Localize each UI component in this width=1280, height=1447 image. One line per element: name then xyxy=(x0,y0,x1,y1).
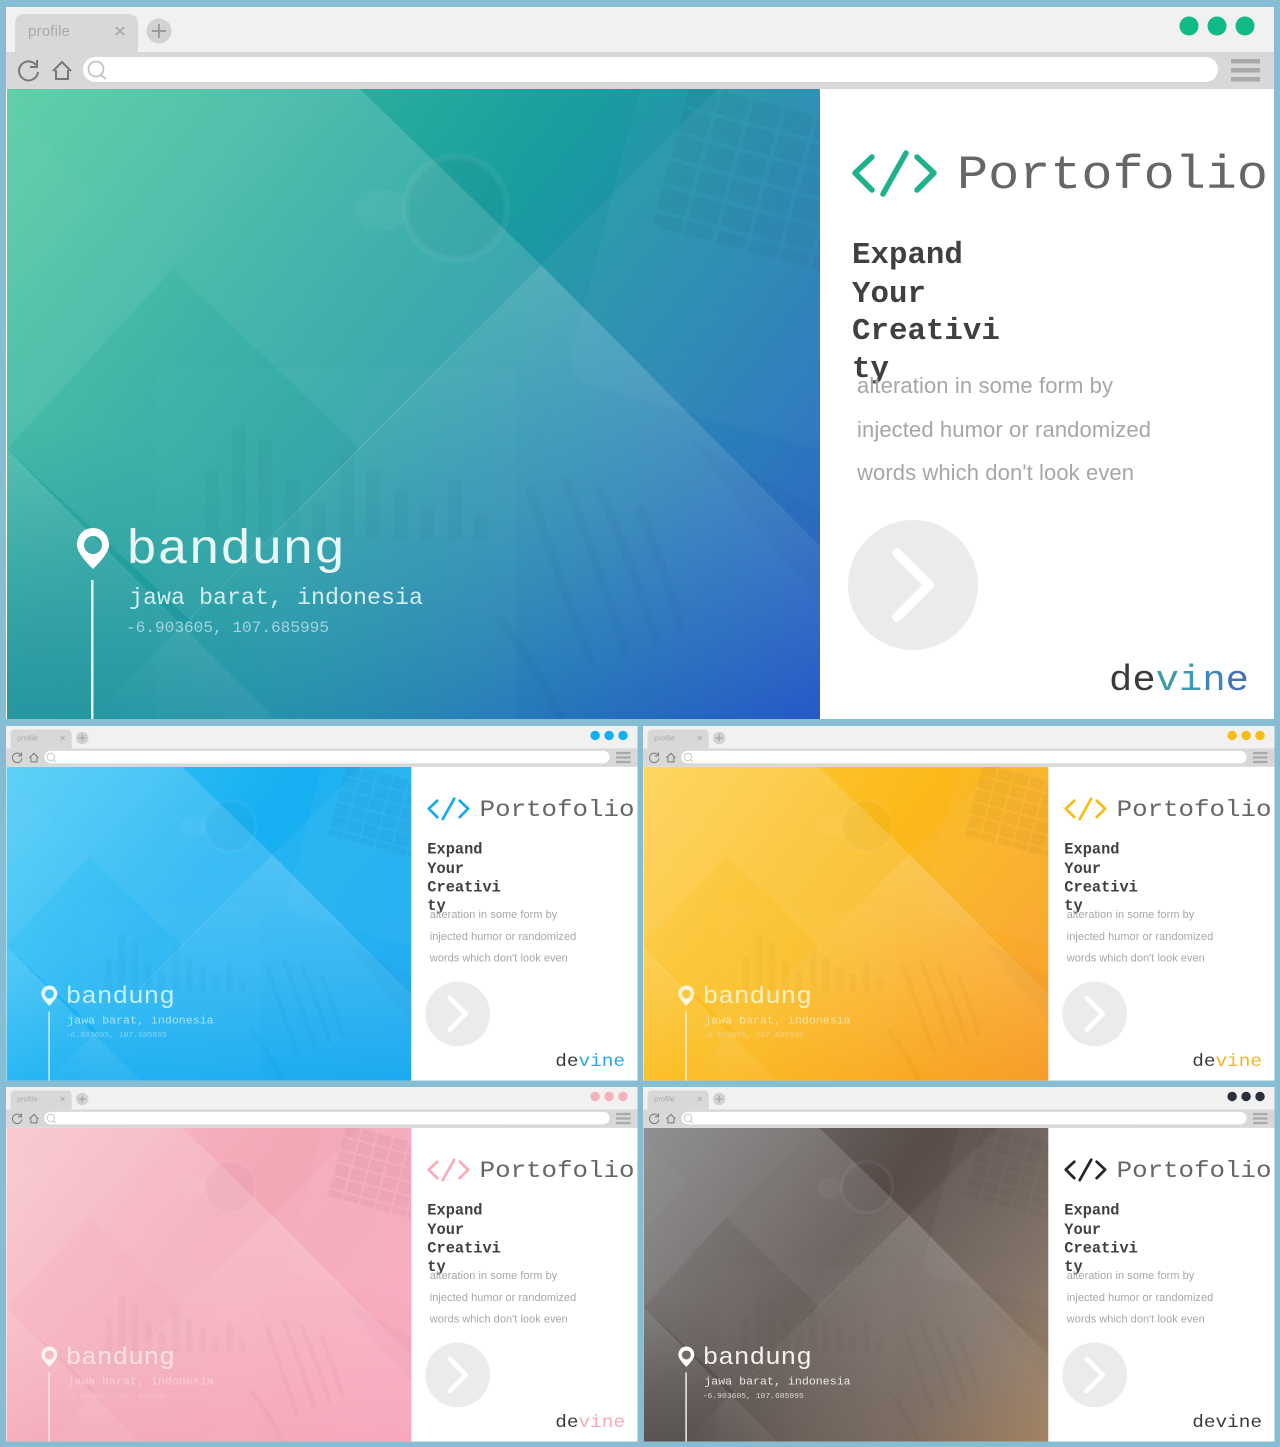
icon: next arrow button xyxy=(848,520,978,650)
pin line xyxy=(48,1011,50,1081)
window control dots xyxy=(1180,16,1254,36)
icon: location pin xyxy=(77,528,109,569)
window control dots xyxy=(1227,1092,1265,1101)
icon: code brackets xyxy=(429,1160,468,1180)
hero image xyxy=(6,1123,442,1442)
icon: code brackets xyxy=(1066,799,1105,819)
heading: Expand xyxy=(1064,840,1120,858)
hero image xyxy=(643,762,1079,1081)
title: Portofolio xyxy=(1117,798,1271,824)
icon: code brackets xyxy=(855,153,934,194)
icon: location pin xyxy=(678,985,694,1006)
tab label: profile xyxy=(28,23,70,40)
panel: dark browser window xyxy=(643,1087,1274,1442)
heading: Creativi xyxy=(427,1239,501,1257)
tab label: profile xyxy=(654,733,675,742)
heading: ty xyxy=(852,352,889,387)
heading: ty xyxy=(1064,897,1083,915)
body text: alteration in some form by xyxy=(430,909,558,921)
heading: Your xyxy=(1064,860,1101,878)
panel: yellow browser window xyxy=(643,726,1274,1081)
panel: blue browser window xyxy=(6,726,637,1081)
body text: injected humor or randomized xyxy=(1067,1292,1213,1304)
heading: Creativi xyxy=(852,314,1000,349)
body text: alteration in some form by xyxy=(857,373,1113,398)
heading: Expand xyxy=(852,238,963,273)
tab label: profile xyxy=(17,733,38,742)
browser chrome xyxy=(643,1087,1274,1442)
region: jawa barat, indonesia xyxy=(129,585,423,611)
heading: Your xyxy=(427,860,464,878)
region: jawa barat, indonesia xyxy=(704,1375,851,1388)
coordinates: -6.903605, 107.685995 xyxy=(66,1393,167,1401)
body text: words which don't look even xyxy=(429,953,568,965)
icon: location pin xyxy=(41,1346,57,1367)
icon: next arrow button xyxy=(425,981,490,1046)
hero image xyxy=(7,80,882,719)
coordinates: -6.903605, 107.685995 xyxy=(703,1393,804,1401)
hero image xyxy=(643,1123,1079,1442)
pin line xyxy=(685,1011,687,1081)
icon: location pin xyxy=(678,1346,694,1367)
body text: injected humor or randomized xyxy=(857,417,1151,442)
browser chrome xyxy=(6,1087,637,1442)
coordinates: -6.903605, 107.685995 xyxy=(703,1032,804,1040)
heading: Expand xyxy=(427,840,483,858)
body text: words which don't look even xyxy=(429,1314,568,1326)
icon: code brackets xyxy=(1066,1160,1105,1180)
pin line xyxy=(91,580,94,719)
pin line xyxy=(685,1372,687,1442)
title: Portofolio xyxy=(480,1159,634,1185)
icon: location pin xyxy=(41,985,57,1006)
brand logo: devine xyxy=(1109,660,1249,701)
browser chrome xyxy=(6,7,1274,719)
brand logo: devine xyxy=(1192,1413,1262,1433)
tab label: profile xyxy=(654,1094,675,1103)
window control dots xyxy=(1227,731,1265,740)
city name: bandung xyxy=(703,1345,812,1372)
brand logo: devine xyxy=(555,1052,625,1072)
heading: Your xyxy=(1064,1221,1101,1239)
title: Portofolio xyxy=(957,150,1268,203)
city name: bandung xyxy=(126,524,345,578)
body text: injected humor or randomized xyxy=(1067,931,1213,943)
city name: bandung xyxy=(66,984,175,1011)
title: Portofolio xyxy=(1117,1159,1271,1185)
body text: words which don't look even xyxy=(856,460,1134,485)
region: jawa barat, indonesia xyxy=(67,1014,214,1027)
body text: injected humor or randomized xyxy=(430,931,576,943)
panel: pink browser window xyxy=(6,1087,637,1442)
body text: alteration in some form by xyxy=(1067,1270,1195,1282)
brand logo: devine xyxy=(1192,1052,1262,1072)
coordinates: -6.903605, 107.685995 xyxy=(66,1032,167,1040)
hero image xyxy=(6,762,442,1081)
heading: Creativi xyxy=(1064,1239,1138,1257)
icon: next arrow button xyxy=(425,1342,490,1407)
body text: words which don't look even xyxy=(1066,953,1205,965)
icon: next arrow button xyxy=(1062,981,1127,1046)
body text: alteration in some form by xyxy=(430,1270,558,1282)
browser chrome xyxy=(643,726,1274,1081)
body text: alteration in some form by xyxy=(1067,909,1195,921)
tab label: profile xyxy=(17,1094,38,1103)
region: jawa barat, indonesia xyxy=(704,1014,851,1027)
heading: Expand xyxy=(1064,1201,1120,1219)
pin line xyxy=(48,1372,50,1442)
body text: words which don't look even xyxy=(1066,1314,1205,1326)
window control dots xyxy=(590,1092,628,1101)
heading: Your xyxy=(852,277,926,312)
browser chrome xyxy=(6,726,637,1081)
brand logo: devine xyxy=(555,1413,625,1433)
icon: next arrow button xyxy=(1062,1342,1127,1407)
city name: bandung xyxy=(703,984,812,1011)
heading: Your xyxy=(427,1221,464,1239)
icon: code brackets xyxy=(429,799,468,819)
coordinates: -6.903605, 107.685995 xyxy=(126,619,329,637)
heading: ty xyxy=(1064,1258,1083,1276)
heading: Creativi xyxy=(427,878,501,896)
heading: ty xyxy=(427,1258,446,1276)
heading: Creativi xyxy=(1064,878,1138,896)
heading: Expand xyxy=(427,1201,483,1219)
heading: ty xyxy=(427,897,446,915)
city name: bandung xyxy=(66,1345,175,1372)
body text: injected humor or randomized xyxy=(430,1292,576,1304)
region: jawa barat, indonesia xyxy=(67,1375,214,1388)
panel: main green-blue browser window xyxy=(6,7,1274,719)
window control dots xyxy=(590,731,628,740)
title: Portofolio xyxy=(480,798,634,824)
